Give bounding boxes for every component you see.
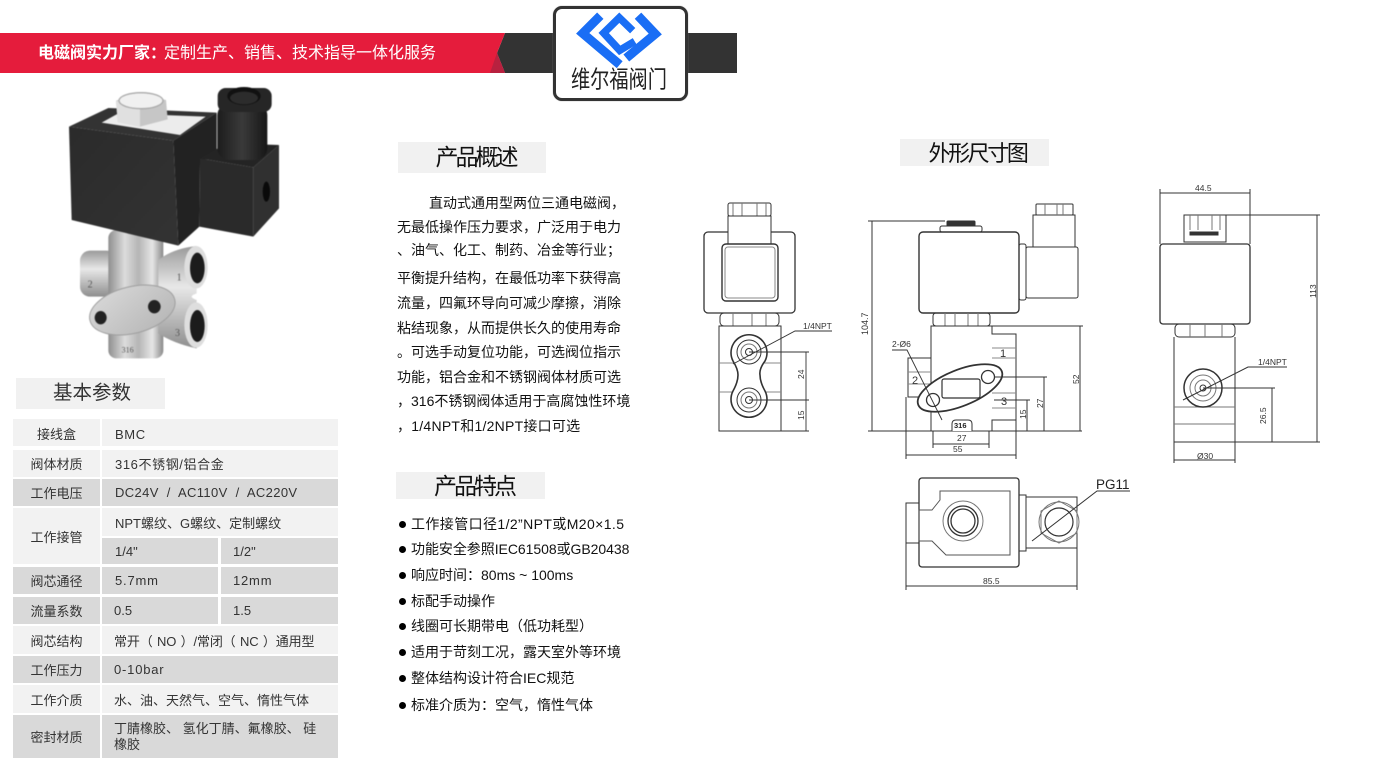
row: 工作压力: 0-10bar	[114, 662, 164, 677]
text block: product overview: 、油气、化工、制药、冶金等行业；	[397, 242, 621, 258]
text block: product overview: 直动式通用型两位三通电磁阀，	[429, 195, 625, 211]
heading: 基本参数: 基本参数	[53, 382, 131, 404]
list: product features: 标配手动操作	[411, 593, 495, 609]
row: 接线盒: BMC	[115, 426, 146, 442]
row: 密封材质: 丁腈橡胶、 氢化丁腈、氟橡胶、 硅橡胶	[114, 720, 316, 752]
text block: product overview: ，316不锈钢阀体适用于高腐蚀性环境	[397, 393, 630, 409]
row: 接线盒: 接线盒	[37, 427, 76, 442]
text block: product overview: 功能，铝合金和不锈钢阀体材质可选	[397, 369, 621, 385]
heading: 基本参数	[16, 378, 165, 409]
valve body metal	[80, 230, 208, 358]
row: 阀体材质: 316不锈钢/铝合金	[115, 457, 224, 472]
heading: 外形尺寸图: 外形尺寸图	[928, 141, 1026, 166]
drawing: front view with flange: 316	[954, 421, 967, 430]
logo: company badge	[553, 6, 688, 101]
heading: 产品特点: 产品特点	[434, 473, 514, 499]
text block: product overview: 流量，四氟环导向可减少摩擦，消除	[397, 295, 621, 311]
drawing: side view: 44.5	[1195, 183, 1212, 193]
banner: red and dark ribbon	[0, 33, 737, 73]
drawing: side view: 1/4NPT	[1258, 357, 1287, 367]
drawing: end view with ports: 15	[796, 410, 806, 420]
parameter table	[13, 419, 338, 758]
row: 工作接管: 工作接管	[30, 530, 82, 544]
drawing: front view with flange: 27	[957, 433, 967, 443]
row: 流量系数: 0.5	[114, 603, 132, 618]
valve body metal: 3	[175, 328, 180, 339]
list: product features: 响应时间：80ms ~ 100ms	[411, 567, 573, 583]
drawing: front view with flange: 1	[1000, 348, 1006, 360]
row: 工作接管: NPT螺纹、G螺纹、定制螺纹	[115, 516, 281, 530]
drawing: front view with flange: 3	[1001, 396, 1007, 408]
row: 阀芯结构: 阀芯结构	[30, 634, 82, 648]
logo wordmark: 维尔福阀门	[571, 67, 667, 94]
list: product features: 功能安全参照IEC61508或GB20438	[411, 541, 629, 557]
drawing: side view: 26.5	[1258, 407, 1268, 424]
drawing: side view	[1160, 183, 1320, 463]
text block: product overview: 无最低操作压力要求，广泛用于电力	[397, 219, 621, 235]
black coil	[69, 108, 217, 246]
text block: product overview	[397, 195, 630, 434]
list: product features: 标准介质为：空气，惰性气体	[411, 697, 593, 713]
row: 工作介质	[13, 685, 338, 713]
banner slogan: 电磁阀实力厂家：	[38, 45, 166, 62]
row: 阀芯通径: 12mm	[233, 573, 272, 588]
row: 阀芯通径: 5.7mm	[115, 573, 159, 588]
row: 阀体材质	[13, 450, 338, 477]
product photo: solenoid valve	[68, 86, 280, 359]
drawing: front view with flange: 15	[1018, 409, 1028, 419]
row: 工作电压	[13, 479, 338, 506]
drawing: front view with flange: 55	[953, 444, 963, 454]
drawing: end view with ports: 24	[796, 369, 806, 379]
text block: product overview: ，1/4NPT和1/2NPT接口可选	[397, 418, 580, 434]
row: 阀芯通径: 阀芯通径	[30, 574, 82, 589]
row: 接线盒	[13, 419, 338, 446]
row: 流量系数	[13, 597, 338, 624]
row: 密封材质: 密封材质	[30, 730, 82, 745]
valve body metal: 316	[122, 346, 134, 355]
hex nut	[116, 93, 168, 127]
heading: 产品概述: 产品概述	[436, 144, 516, 170]
drawing: side view: Ø30	[1197, 451, 1213, 461]
row: 工作接管: 1/4"	[115, 544, 138, 558]
drawing: end view with ports	[704, 203, 832, 431]
row: 阀芯结构	[13, 626, 338, 654]
text block: product overview: 平衡提升结构，在最低功率下获得高	[397, 270, 621, 286]
banner slogan	[38, 44, 436, 62]
drawing: end view with ports: 1/4NPT	[803, 321, 832, 331]
heading: 外形尺寸图	[900, 139, 1049, 166]
drawing: top view with PG11: PG11	[1096, 477, 1130, 492]
list: product features: 整体结构设计符合IEC规范	[411, 670, 574, 686]
drawing: side view: 113	[1308, 284, 1318, 298]
text block: product overview: 。可选手动复位功能，可选阀位指示	[397, 344, 621, 360]
row: 工作压力	[13, 656, 338, 683]
drawing: front view with flange: 2	[912, 375, 918, 387]
row: 工作接管: 1/2"	[233, 544, 256, 558]
drawing: front view with flange: 2-Ø6	[892, 339, 911, 349]
heading: 产品特点	[396, 472, 545, 499]
valve body metal: 2	[88, 279, 93, 290]
row: 密封材质	[13, 715, 338, 758]
drawing: front view with flange: 52	[1071, 374, 1081, 384]
row: 工作电压: 工作电压	[30, 486, 82, 501]
drawing: top view with PG11: 85.5	[983, 576, 1000, 586]
list: product features: 适用于苛刻工况，露天室外等环境	[411, 644, 621, 660]
row: 阀芯结构: 常开（ NO ）/常闭（ NC ）通用型	[114, 634, 314, 648]
drawing: front view with flange: 27	[1035, 398, 1045, 408]
row: 流量系数: 流量系数	[30, 604, 82, 619]
row: 工作介质: 水、油、天然气、空气、惰性气体	[114, 692, 309, 708]
row: 流量系数: 1.5	[233, 603, 251, 618]
list: product features	[399, 516, 629, 713]
heading: 产品概述	[398, 142, 546, 173]
row: 工作电压: DC24V / AC110V / AC220V	[115, 485, 297, 500]
list: product features: 线圈可长期带电（低功耗型）	[411, 618, 593, 634]
drawing: front view with flange	[860, 204, 1083, 459]
drawing: top view with PG11	[906, 477, 1130, 590]
row: 阀芯通径	[13, 567, 338, 594]
text block: product overview: 粘结现象，从而提供长久的使用寿命	[397, 320, 621, 336]
row: 阀体材质: 阀体材质	[30, 457, 82, 472]
row: 工作介质: 工作介质	[30, 692, 82, 708]
connector box	[199, 87, 279, 237]
list: product features: 工作接管口径1/2”NPT或M20×1.5	[411, 516, 624, 532]
logo mark: blue interlocked chevrons	[576, 12, 662, 68]
valve body metal: 1	[177, 273, 182, 284]
banner slogan: 定制生产、销售、技术指导一体化服务	[164, 45, 436, 62]
row: 工作压力: 工作压力	[30, 663, 82, 678]
row: 工作接管	[13, 508, 338, 564]
dimension drawings	[703, 183, 1320, 590]
drawing: front view with flange: 104.7	[860, 312, 870, 335]
